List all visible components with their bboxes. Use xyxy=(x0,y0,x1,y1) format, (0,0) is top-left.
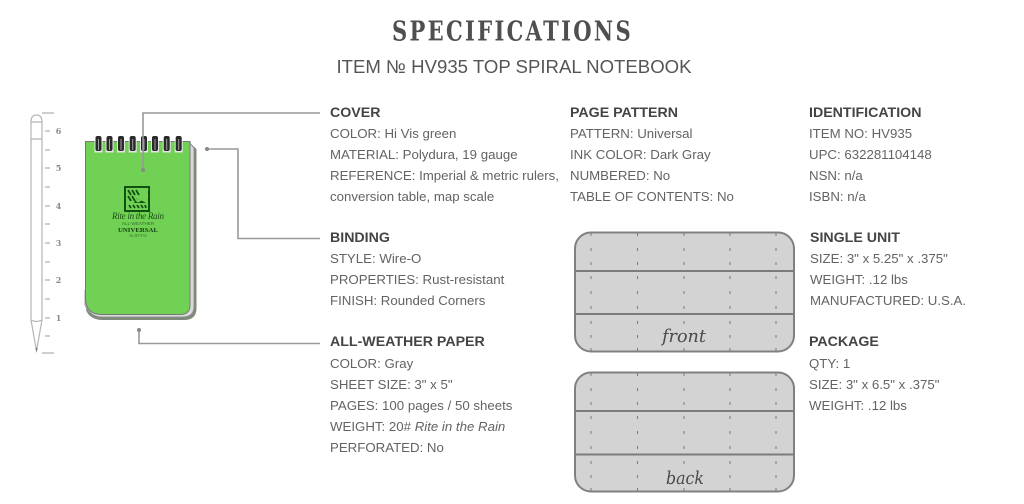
text block: cover: MATERIAL: Polydura, 19 gauge xyxy=(330,147,518,162)
text block: cover xyxy=(330,105,559,204)
icon: pencil xyxy=(31,115,42,351)
text block: all-weather paper: SHEET SIZE: 3" x 5" xyxy=(330,377,453,392)
text block: page pattern: INK COLOR: Dark Gray xyxy=(570,147,711,162)
text block: identification: NSN: n/a xyxy=(809,168,863,183)
text block: page pattern: NUMBERED: No xyxy=(570,168,670,183)
text block: all-weather paper: ALL-WEATHER PAPER xyxy=(330,334,485,350)
text block: page pattern: PATTERN: Universal xyxy=(570,126,692,141)
spiral binding xyxy=(94,136,183,152)
text block: package: QTY: 1 xyxy=(809,356,850,371)
ruler numerals xyxy=(56,126,62,323)
page pattern: back xyxy=(575,372,794,492)
ruler numerals: 2 xyxy=(56,275,61,285)
notebook cover xyxy=(86,142,190,314)
text block: single unit: SIZE: 3" x 5.25" x .375" xyxy=(810,251,948,266)
text block: binding: PROPERTIES: Rust-resistant xyxy=(330,272,504,287)
text block: all-weather paper: PAGES: 100 pages / 50 sheets xyxy=(330,398,512,413)
leader line: binding xyxy=(205,147,320,238)
label: front: front xyxy=(660,326,707,347)
text block: identification: ITEM NO: HV935 xyxy=(809,126,912,141)
cover text xyxy=(111,211,164,238)
ruler numerals: 1 xyxy=(56,313,61,323)
title: SPECIFICATIONS xyxy=(392,15,631,47)
text block: binding: BINDING xyxy=(330,230,390,246)
label: back: back xyxy=(666,468,704,489)
text block: identification: UPC: 632281104148 xyxy=(809,147,932,162)
ruler numerals: 5 xyxy=(56,163,61,173)
text block: single unit: WEIGHT: .12 lbs xyxy=(810,272,908,287)
text block: identification: ISBN: n/a xyxy=(809,189,866,204)
text block: cover: REFERENCE: Imperial & metric rulers, xyxy=(330,168,559,183)
text block: page pattern: TABLE OF CONTENTS: No xyxy=(570,189,734,204)
notebook page stack xyxy=(86,143,196,320)
text block: package: WEIGHT: .12 lbs xyxy=(809,398,907,413)
text block: package: PACKAGE xyxy=(809,334,879,350)
cover text: ALL-WEATHER xyxy=(122,221,155,226)
text block: binding: STYLE: Wire-O xyxy=(330,251,421,266)
pencil ruler xyxy=(31,113,62,353)
ruler numerals: 3 xyxy=(56,238,62,248)
ruler numerals: 6 xyxy=(56,126,62,136)
page pattern: front xyxy=(575,232,794,352)
text block: single unit: MANUFACTURED: U.S.A. xyxy=(810,293,966,308)
subtitle: ITEM № HV935 TOP SPIRAL NOTEBOOK xyxy=(336,56,692,77)
text block: binding xyxy=(330,230,504,308)
text block: package: SIZE: 3" x 6.5" x .375" xyxy=(809,377,939,392)
text block: single unit: SINGLE UNIT xyxy=(810,230,900,246)
notebook xyxy=(85,136,196,320)
text block: package xyxy=(809,334,939,413)
leader line: cover xyxy=(141,113,320,172)
cover text: UNIVERSAL xyxy=(118,227,159,234)
logo xyxy=(125,187,149,211)
cover text: № HV935 xyxy=(129,233,147,238)
text block: binding: FINISH: Rounded Corners xyxy=(330,293,485,308)
text block: all-weather paper: PERFORATED: No xyxy=(330,440,444,455)
text block: all-weather paper: WEIGHT: 20# Rite in the Rain xyxy=(330,419,505,434)
text block: all-weather paper: COLOR: Gray xyxy=(330,356,413,371)
ruler numerals: 4 xyxy=(56,201,62,211)
text block: identification: IDENTIFICATION xyxy=(809,105,921,121)
cover text: Rite in the Rain xyxy=(111,211,164,221)
leader line: paper xyxy=(137,328,320,344)
text block: page pattern: PAGE PATTERN xyxy=(570,105,678,121)
text block: single unit xyxy=(810,230,966,308)
text block: all-weather paper xyxy=(330,334,512,455)
text block: cover: conversion table, map scale xyxy=(330,189,494,204)
text block: page pattern xyxy=(570,105,734,204)
text block: cover: COVER xyxy=(330,105,380,121)
text block: cover: COLOR: Hi Vis green xyxy=(330,126,456,141)
text block: identification xyxy=(809,105,932,204)
